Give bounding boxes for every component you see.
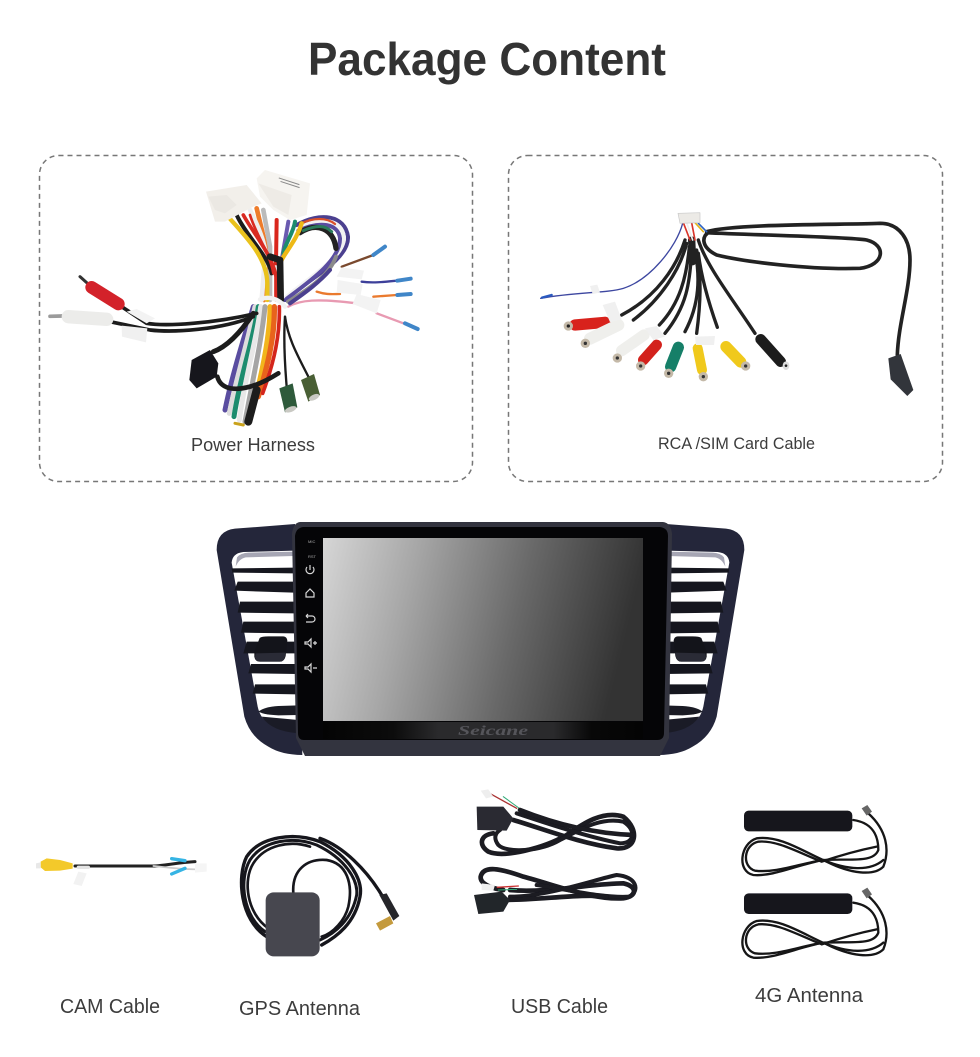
brand logo: Seicane [458,724,528,739]
label: gps antenna: GPS Antenna [239,998,361,1020]
rca plugs [50,277,257,342]
panel: power harness [40,156,472,482]
wire tags [590,285,715,345]
title: Package Content [308,33,666,85]
side buttons: RST [308,554,317,559]
black multi-pin connector [189,350,218,388]
icon: back [306,614,315,622]
item: usb cable [474,789,635,1018]
icon: volume down [305,664,317,672]
icon: home [306,589,314,597]
icon: volume up [305,639,317,647]
wire tie [260,298,285,307]
connector: upper white plugs [206,170,310,222]
image: rca sim cable [541,213,913,396]
item: cam cable [36,858,207,1018]
label: rca sim: RCA /SIM Card Cable [658,435,815,453]
panel: rca and sim card cable [508,156,942,482]
wire labels [337,267,381,313]
image: power harness wiring [50,170,418,425]
side buttons [305,539,317,672]
side buttons: MIC [308,539,315,544]
head unit [217,522,744,756]
item: gps antenna [239,837,399,1020]
screen [323,538,643,721]
blue terminals [373,247,418,329]
label: usb cable: USB Cable [511,996,608,1018]
left vent frame [217,524,302,755]
image: gps antenna [241,837,399,956]
label: 4g antenna: 4G Antenna [755,985,864,1007]
item: 4g antenna [742,805,886,1007]
white connector [678,213,700,223]
right vent frame [659,524,744,755]
label: cam cable: CAM Cable [60,996,160,1018]
icon: power [306,565,314,574]
image: usb cables [474,789,635,914]
image: cam cable [36,858,207,886]
image: 4g antennas [742,805,886,958]
brand strip [323,722,643,739]
label: power harness: Power Harness [191,435,315,455]
rca plugs row [564,285,913,396]
capacitors [279,374,320,414]
bezel [292,522,672,756]
sim card module [888,354,913,396]
